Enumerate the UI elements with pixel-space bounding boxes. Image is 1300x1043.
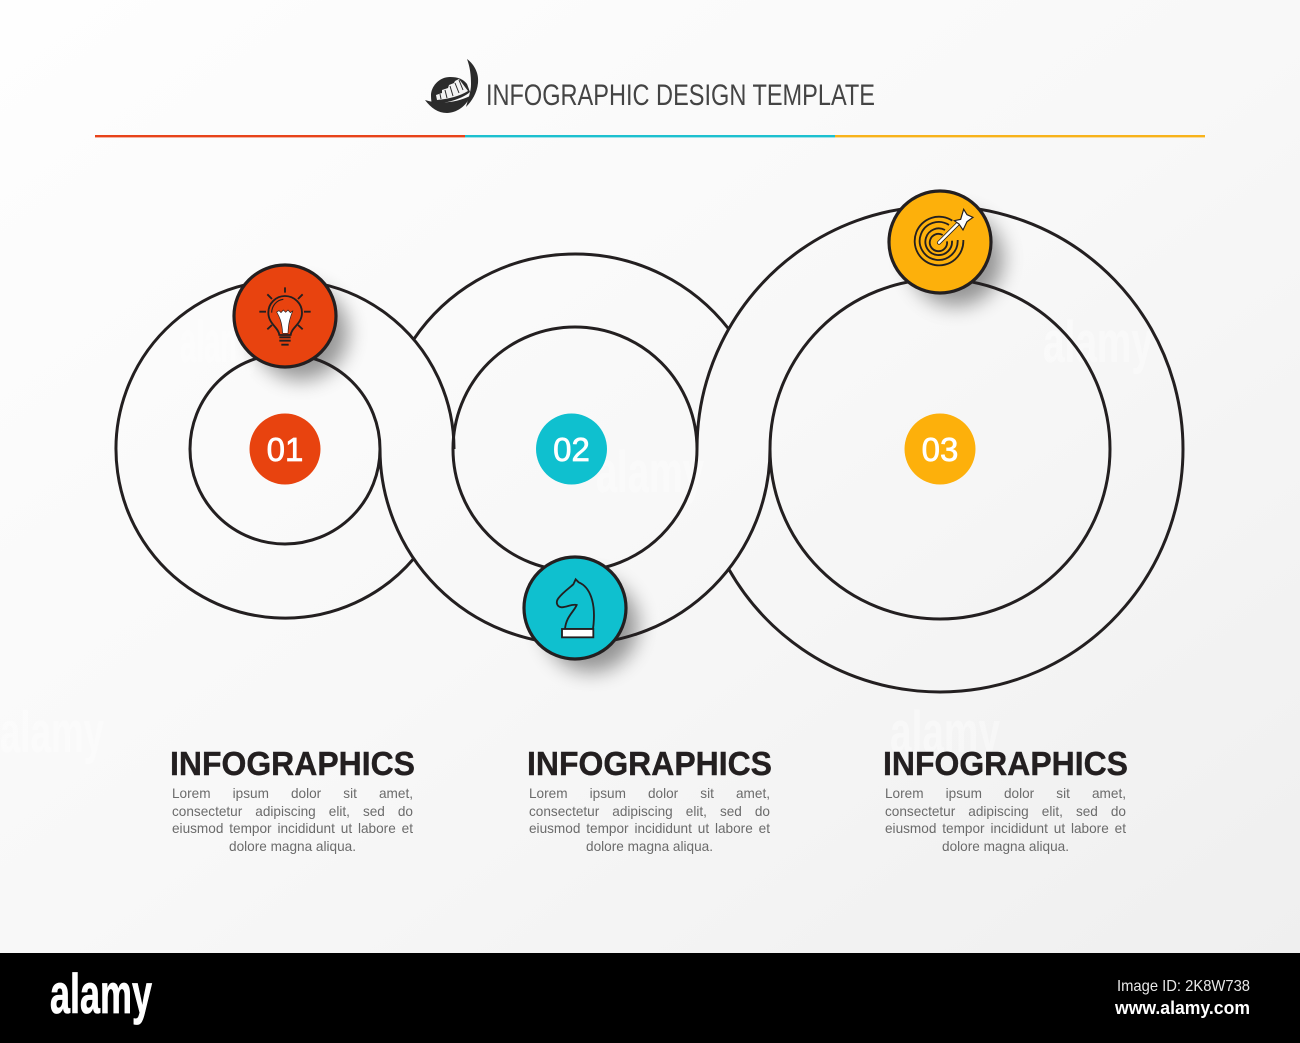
ring 2 inner circle [453,327,697,571]
watermarks: alamy [1043,310,1153,375]
heading column 1: INFOGRAPHICS [170,745,415,782]
footer band [0,953,1300,1043]
header title: INFOGRAPHIC DESIGN TEMPLATE [486,79,875,112]
watermarks: alamy [890,700,1000,765]
footer url: www.alamy.com [1114,998,1250,1018]
icon: target and dart [915,209,973,265]
body text column 2: dolore magna aliqua. [586,839,713,854]
watermarks: alamy [0,700,104,765]
header tri-colour rule [95,135,1205,137]
footer logo: alamy [50,962,152,1025]
body text column 2: eiusmod tempor incididunt ut labore et [529,821,770,836]
step 1 icon node [234,265,336,367]
number badge 03 [904,414,976,484]
body text column 1: dolore magna aliqua. [229,839,356,854]
body text column 3: Lorem ipsum dolor sit amet, [885,786,1126,801]
body text column 1: Lorem ipsum dolor sit amet, [172,786,413,801]
header logo icon [425,59,478,113]
ring 3 outer arc [697,206,1183,692]
body text column 2: Lorem ipsum dolor sit amet, [529,786,770,801]
ring 3 inner circle [770,279,1110,619]
watermarks: alamy [596,440,704,505]
body text column 3: dolore magna aliqua. [942,839,1069,854]
icon: light bulb [259,287,311,345]
ring 2 outer top arc [414,254,729,339]
body text column 1 [172,786,413,854]
body text column 3: eiusmod tempor incididunt ut labore et [885,821,1126,836]
ring chain diagram [116,206,1183,692]
body text column 2 [529,786,770,854]
watermarks: alamy [180,310,262,375]
heading column 2: INFOGRAPHICS [527,745,772,782]
body text column 1: eiusmod tempor incididunt ut labore et [172,821,413,836]
number badge 03: 03 [922,431,958,468]
number badge 01: 01 [267,431,303,468]
step 2 icon node [524,557,626,659]
icon: chess knight [557,579,594,637]
number badge 02: 02 [553,431,590,468]
ring 1 outer arc [116,280,454,618]
body text column 2: consectetur adipiscing elit, sed do [529,804,770,819]
body text column 1: consectetur adipiscing elit, sed do [172,804,413,819]
number badge 02 [536,414,607,484]
step 3 icon node [889,191,991,293]
heading column 3: INFOGRAPHICS [883,745,1128,782]
body text column 3: consectetur adipiscing elit, sed do [885,804,1126,819]
footer image id: Image ID: 2K8W738 [1117,978,1250,995]
watermarks [0,310,1153,765]
ring 2 outer bottom arc [380,449,770,644]
ring 1 inner circle [190,354,380,544]
number badge 01 [250,414,320,484]
node shadows [254,212,1003,672]
body text column 3 [885,786,1126,854]
